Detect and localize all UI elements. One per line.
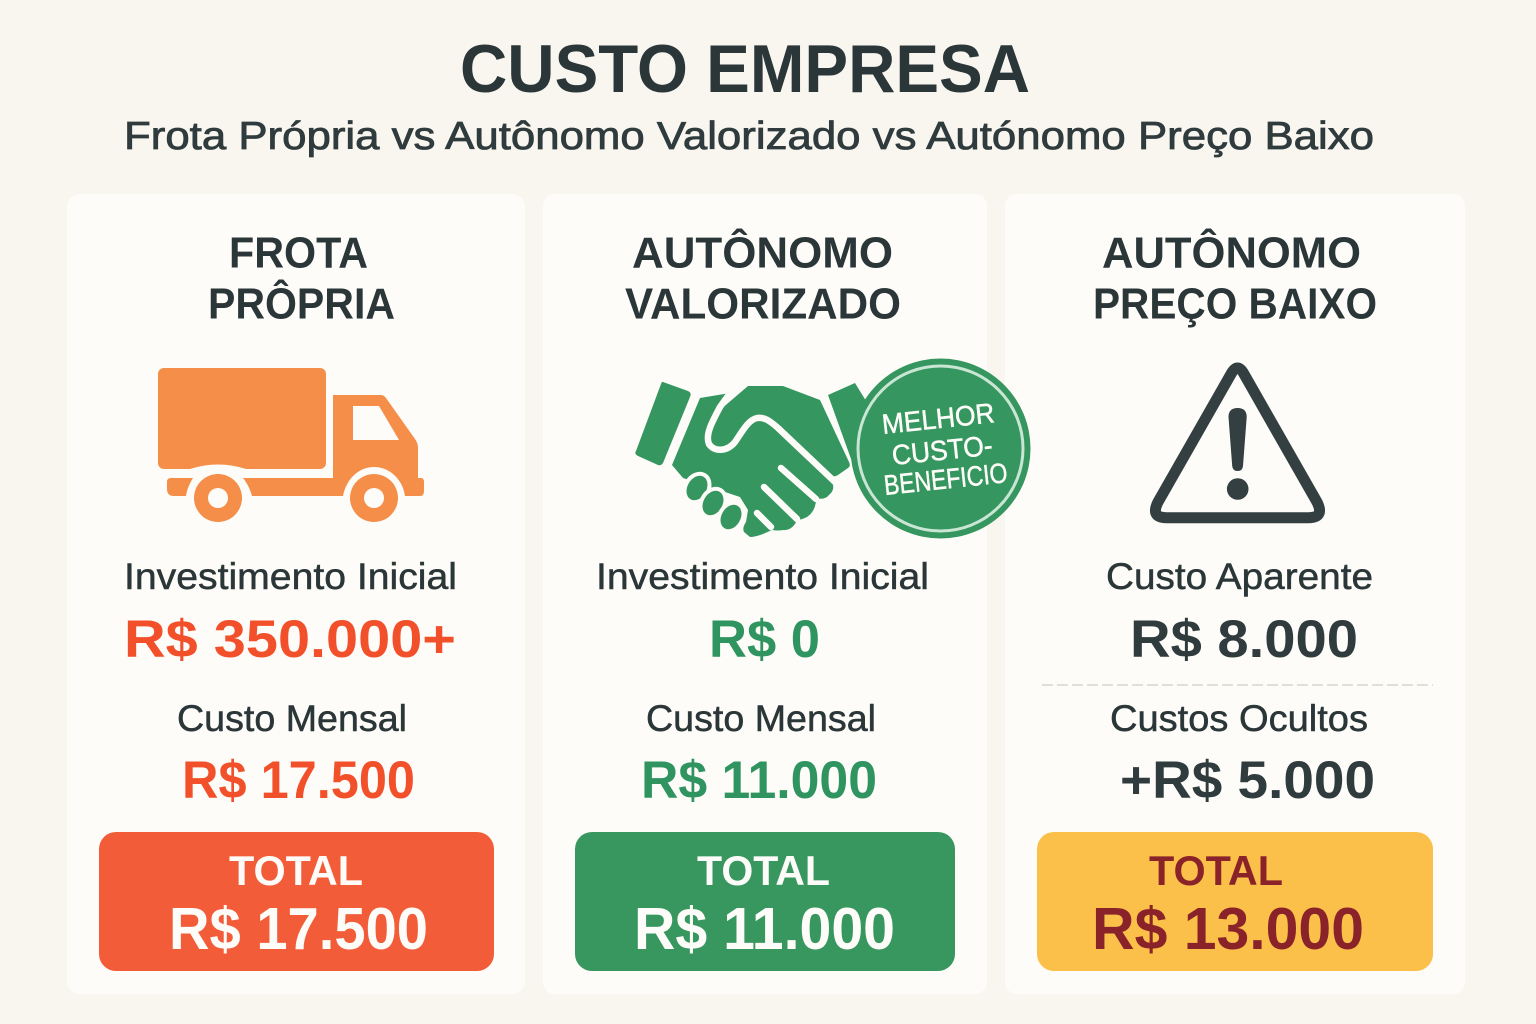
value: custo aparente: R$ 8.000 — [1130, 610, 1358, 669]
icon: handshake — [635, 382, 890, 537]
heading: frota própria: FROTA — [229, 228, 368, 278]
total box: autônomo preço baixo — [1037, 832, 1433, 971]
label: custo mensal: Custo Mensal — [177, 698, 407, 739]
label: investimento inicial: Investimento Inicial — [124, 556, 457, 597]
total box: autônomo valorizado: TOTAL — [697, 847, 830, 894]
value: investimento: R$ 0 — [709, 610, 820, 669]
total box: frota própria: R$ 17.500 — [169, 896, 428, 962]
icon: truck — [158, 368, 424, 522]
title: CUSTO EMPRESA — [460, 31, 1030, 107]
value: custo mensal: R$ 11.000 — [641, 751, 877, 810]
total box: frota própria: TOTAL — [229, 847, 363, 894]
total box: autônomo preço baixo: R$ 13.000 — [1092, 896, 1364, 962]
value: custos ocultos: +R$ 5.000 — [1120, 751, 1375, 810]
badge: melhor custo-benefício: CUSTO- — [890, 430, 994, 471]
heading: autônomo preço baixo — [1093, 226, 1377, 328]
label: custo aparente: Custo Aparente — [1106, 556, 1373, 597]
badge: melhor custo-benefício — [850, 358, 1030, 538]
subtitle: Frota Própria vs Autônomo Valorizado vs Autónomo Preço Baixo — [124, 115, 1374, 158]
label: custos ocultos: Custos Ocultos — [1110, 698, 1368, 739]
heading: autônomo valorizado: AUTÔNOMO — [632, 226, 893, 278]
value: custo mensal: R$ 17.500 — [182, 751, 415, 810]
panel: autônomo valorizado — [543, 194, 987, 994]
value: investimento: R$ 350.000+ — [124, 610, 456, 669]
total box: autônomo preço baixo: TOTAL — [1149, 847, 1283, 894]
heading: autônomo preço baixo: PREÇO BAIXO — [1093, 280, 1377, 328]
heading: autônomo valorizado: VALORIZADO — [625, 280, 901, 328]
label: investimento inicial: Investimento Inicial — [596, 556, 929, 597]
heading: autônomo preço baixo: AUTÔNOMO — [1102, 226, 1361, 278]
panel: autônomo preço baixo — [1005, 194, 1465, 994]
total box: frota própria — [99, 832, 494, 971]
heading: frota própria: PRÔPRIA — [208, 278, 395, 328]
label: custo mensal: Custo Mensal — [646, 698, 876, 739]
icon: warning triangle — [1155, 368, 1320, 518]
total box: autônomo valorizado: R$ 11.000 — [634, 896, 895, 962]
panel: frota própria — [67, 194, 525, 994]
badge: melhor custo-benefício: MELHOR — [880, 397, 996, 440]
badge: melhor custo-benefício: BENEFICIO — [882, 457, 1009, 501]
total box: autônomo valorizado — [575, 832, 955, 971]
heading: autônomo valorizado — [625, 226, 901, 328]
heading: frota própria — [208, 228, 395, 328]
